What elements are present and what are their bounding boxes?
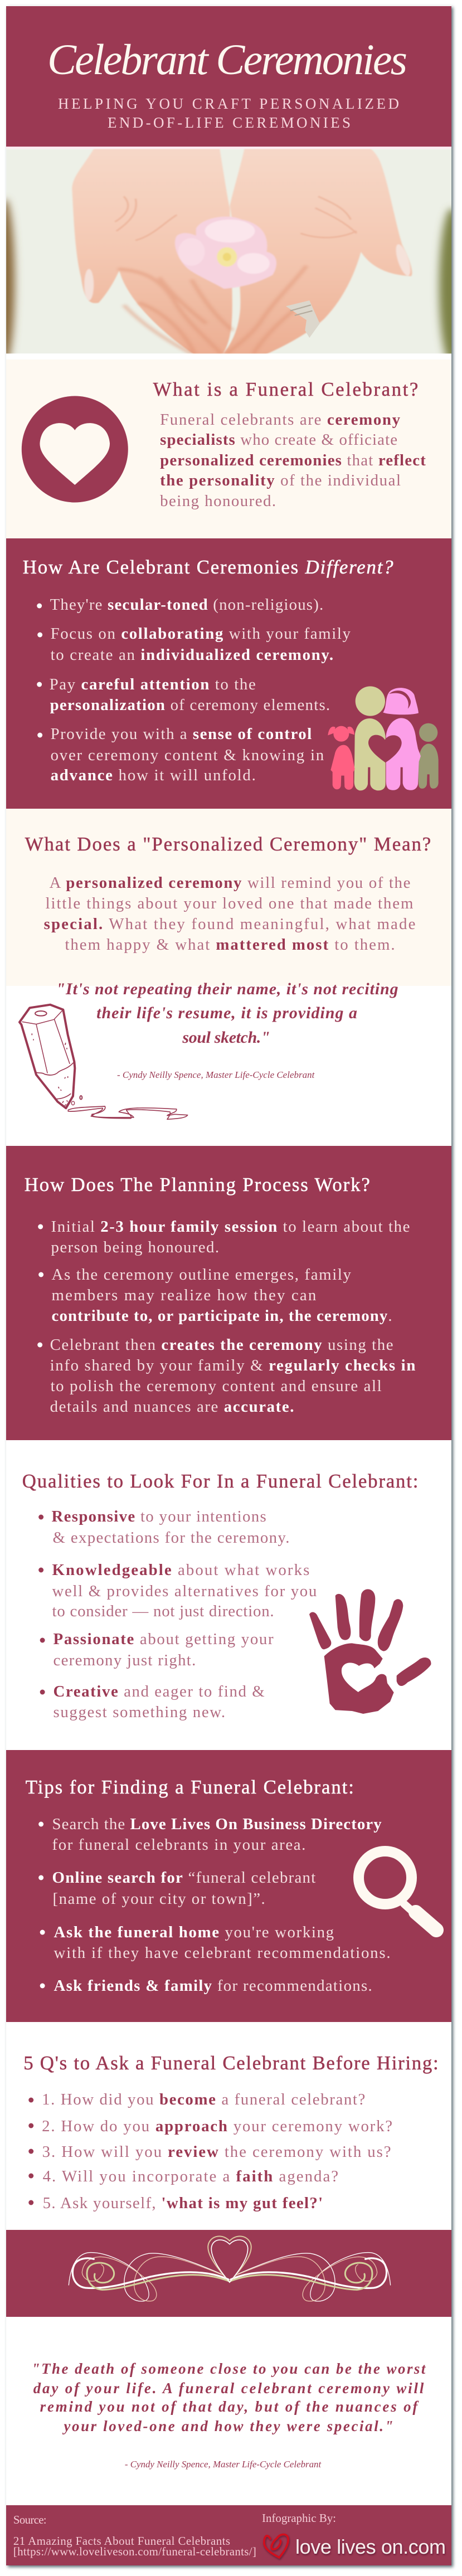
text block: [44, 874, 415, 954]
icon: magnifying glass: [359, 1851, 436, 1930]
subtitle: [58, 95, 399, 131]
panel: soul sketch quote: [20, 980, 398, 1119]
panel: tips for finding a funeral celebrant: [6, 1750, 451, 2022]
bullet list: for funeral celebrants in your area.: [52, 1836, 305, 1854]
bullet list: Provide you with a sense of control: [51, 725, 312, 743]
text block: special. What they found meaningful, what made: [44, 915, 415, 933]
quote: soul sketch.": [182, 1028, 270, 1047]
heading: How Are Celebrant Ceremonies Different?: [23, 556, 393, 578]
bullet list: advance how it will unfold.: [51, 766, 256, 784]
heading: How Does The Planning Process Work?: [25, 1174, 370, 1195]
bullet list: [38, 1815, 391, 1995]
bullet list: They're secular-toned (non-religious).: [50, 596, 323, 614]
ornament: heart and swirls: [69, 2236, 391, 2301]
bullet list: Ask the funeral home you're working: [54, 1923, 334, 1941]
bullet list: Pay careful attention to the: [50, 675, 256, 693]
bullet list: to create an individualized ceremony.: [51, 646, 333, 664]
panel: how does the planning process work: [6, 1146, 451, 1440]
panel: header: [6, 6, 451, 149]
bullet list: personalization of ceremony elements.: [50, 696, 330, 714]
quote: day of your life. A funeral celebrant ceremony will: [33, 2380, 424, 2397]
icon: pencil: [20, 1005, 188, 1119]
panel: how are celebrant ceremonies different: [6, 538, 451, 809]
text block: the personality of the individual: [160, 472, 401, 489]
heading: 5 Q's to Ask a Funeral Celebrant Before Hiring:: [23, 2052, 439, 2074]
credit label: Infographic By:: [262, 2511, 336, 2525]
source text: Source:: [13, 2513, 47, 2526]
bullet list: over ceremony content & knowing in: [51, 746, 324, 764]
question list: [28, 2091, 392, 2212]
subtitle: END-OF-LIFE CEREMONIES: [108, 114, 351, 131]
text block: personalized ceremonies that reflect: [160, 451, 426, 469]
panel: ornament band: [6, 2230, 451, 2317]
bullet list: Knowledgeable about what works: [52, 1561, 309, 1579]
quote: "The death of someone close to you can be the worst: [32, 2360, 426, 2377]
bullet list: well & provides alternatives for you: [52, 1582, 317, 1600]
bullet list: Celebrant then creates the ceremony using the: [50, 1336, 393, 1354]
text block: specialists who create & officiate: [160, 431, 397, 449]
question list: 5. Ask yourself, 'what is my gut feel?': [43, 2194, 323, 2212]
bullet list: info shared by your family & regularly checks in: [50, 1357, 415, 1374]
panel: five questions: [23, 2052, 439, 2212]
icon: heart in circle: [22, 396, 128, 503]
bullet list: Ask friends & family for recommendations.: [54, 1977, 372, 1995]
source text: [13, 2513, 256, 2558]
bullet list: Online search for “funeral celebrant: [52, 1869, 315, 1887]
heading: Tips for Finding a Funeral Celebrant:: [26, 1776, 354, 1798]
quote: "It's not repeating their name, it's not reciting: [56, 980, 398, 998]
text block: them happy & what mattered most to them.: [65, 936, 395, 954]
quote: remind you not of that day, but of the nuances of: [40, 2398, 419, 2415]
source text: [https://www.loveliveson.com/funeral-celebrants/]: [13, 2545, 256, 2558]
photo: hands holding a pink flower: [0, 148, 462, 365]
quote: [56, 980, 398, 1047]
bullet list: [name of your city or town]”.: [53, 1890, 265, 1908]
question list: 4. Will you incorporate a faith agenda?: [43, 2167, 338, 2185]
bullet list: person being honoured.: [51, 1238, 219, 1256]
question list: 2. How do you approach your ceremony work?: [42, 2117, 392, 2135]
bullet list: to polish the ceremony content and ensure all: [51, 1377, 382, 1395]
bullet list: Focus on collaborating with your family: [51, 625, 351, 643]
panel: what does a personalized ceremony mean: [6, 809, 451, 986]
question list: 3. How will you review the ceremony with us?: [42, 2143, 391, 2161]
quote: their life's resume, it is providing a: [96, 1004, 357, 1022]
text block: little things about your loved one that made them: [46, 895, 414, 912]
icon: handprint with heart: [309, 1589, 431, 1714]
icon: family: [328, 686, 439, 790]
panel: footer: [6, 2505, 451, 2565]
heading: Qualities to Look For In a Funeral Celebrant:: [22, 1470, 418, 1492]
bullet list: ceremony just right.: [54, 1651, 196, 1669]
bullet list: As the ceremony outline emerges, family: [52, 1266, 351, 1284]
subtitle: HELPING YOU CRAFT PERSONALIZED: [58, 95, 399, 112]
source text: 21 Amazing Facts About Funeral Celebrants: [13, 2534, 230, 2548]
bullet list: members may realize how they can: [52, 1286, 317, 1304]
bullet list: with if they have celebrant recommendations.: [54, 1944, 391, 1962]
panel: closing quote: [32, 2360, 426, 2470]
bullet list: Passionate about getting your: [54, 1630, 274, 1648]
question list: 1. How did you become a funeral celebrant?: [42, 2091, 365, 2108]
text block: A personalized ceremony will remind you of the: [50, 874, 410, 892]
text block: Funeral celebrants are ceremony: [160, 411, 401, 429]
attribution: - Cyndy Neilly Spence, Master Life-Cycle Celebrant: [125, 2459, 322, 2470]
panel: qualities to look for: [22, 1470, 431, 1721]
heading: What is a Funeral Celebrant?: [153, 378, 418, 400]
quote: your loved-one and how they were special.": [62, 2418, 393, 2434]
bullet list: contribute to, or participate in, the ceremony.: [52, 1307, 392, 1325]
bullet list: Creative and eager to find &: [54, 1683, 265, 1700]
logo: love lives on: love lives on.com: [295, 2535, 446, 2558]
bullet list: Initial 2-3 hour family session to learn about the: [51, 1218, 410, 1236]
text block: being honoured.: [160, 492, 276, 510]
bullet list: & expectations for the ceremony.: [53, 1529, 289, 1547]
bullet list: [38, 1508, 317, 1721]
bullet list: suggest something new.: [54, 1703, 225, 1721]
bullet list: [37, 1218, 415, 1416]
attribution: - Cyndy Neilly Spence, Master Life-Cycle Celebrant: [117, 1070, 315, 1080]
bullet list: Search the Love Lives On Business Directory: [52, 1815, 382, 1833]
bullet list: details and nuances are accurate.: [50, 1398, 294, 1416]
panel: what is a funeral celebrant: [6, 359, 451, 538]
text block: [160, 411, 426, 510]
heading: What Does a "Personalized Ceremony" Mean?: [25, 833, 431, 855]
title: Celebrant Ceremonies: [47, 35, 407, 84]
bullet list: to consider — not just direction.: [52, 1602, 274, 1620]
bullet list: [37, 596, 351, 784]
quote: [32, 2360, 426, 2434]
bullet list: Responsive to your intentions: [52, 1508, 266, 1525]
